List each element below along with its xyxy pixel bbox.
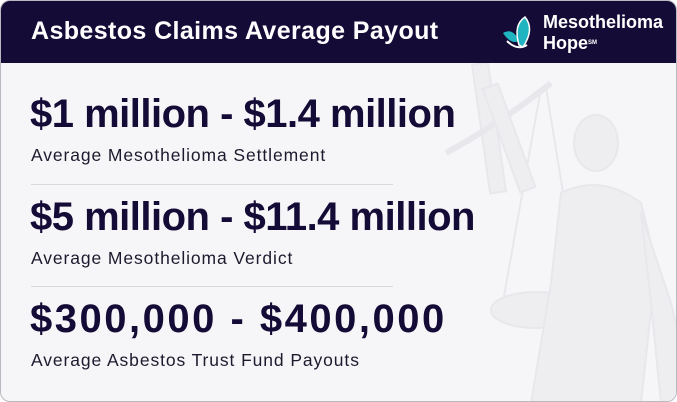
logo: HopeSM [543, 33, 597, 53]
title: Asbestos Claims Average Payout [31, 17, 439, 45]
stat 2 value: $5 million - $11.4 million [30, 195, 475, 239]
stat 2 label: Average Mesothelioma Verdict [31, 248, 293, 268]
background statue [445, 63, 676, 401]
header [1, 1, 677, 63]
logo [503, 12, 664, 53]
stat 1 value: $1 million - $1.4 million [30, 92, 455, 136]
stat 1 label: Average Mesothelioma Settlement [31, 145, 326, 165]
stat 3 value: $300,000 - $400,000 [30, 297, 447, 341]
logo: Mesothelioma [543, 12, 663, 32]
stat 3 label: Average Asbestos Trust Fund Payouts [31, 350, 360, 370]
